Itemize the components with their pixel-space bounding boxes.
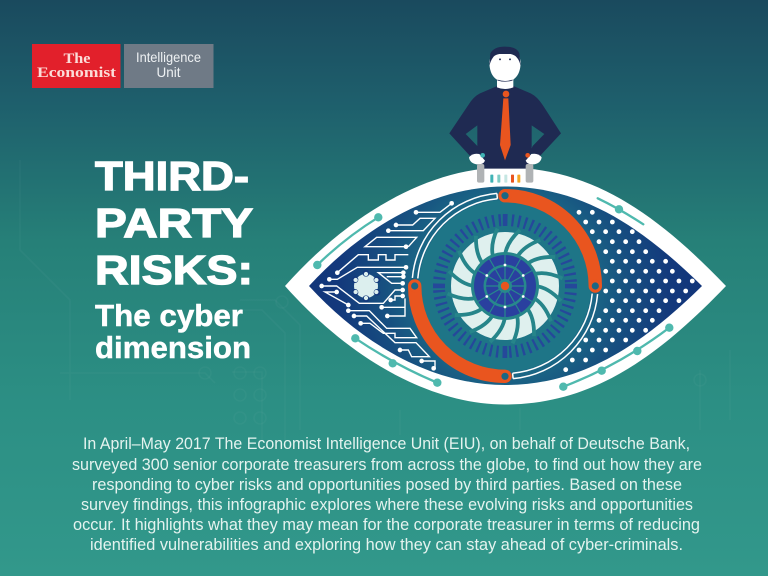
intro paragraph: In April–May 2017 The Economist Intelligence Unit (EIU), on behalf of Deutsche Bank, xyxy=(83,434,690,453)
figure: hands and cuffs xyxy=(469,153,542,164)
subtitle: dimension xyxy=(95,330,251,365)
intro paragraph xyxy=(72,434,702,554)
title: RISKS: xyxy=(95,247,253,293)
intro paragraph: surveyed 300 senior corporate treasurers from across the globe, to find out how they are xyxy=(72,455,702,474)
eye: circuit chip xyxy=(352,270,380,302)
eye: teal accent lines xyxy=(313,198,674,391)
figure: torso and arms xyxy=(449,86,561,169)
eye: dot matrix, right xyxy=(566,212,692,370)
title xyxy=(95,153,253,293)
figure: grey latches xyxy=(477,164,533,183)
intro paragraph: survey findings, this infographic explores where these evolving risks and opportunities xyxy=(81,495,693,514)
eye: circuit board traces, left xyxy=(319,201,454,371)
intro paragraph: responding to cyber risks and opportunities posed by third parties. Based on these xyxy=(92,475,682,494)
eye: blue iris shape xyxy=(309,186,702,385)
intro paragraph: identified vulnerabilities and exploring how they can stay ahead of cyber-criminals. xyxy=(90,535,683,554)
title: THIRD- xyxy=(95,153,249,199)
subtitle xyxy=(95,298,251,365)
eye: turbine blades xyxy=(448,229,562,343)
eye: pupil disc xyxy=(419,200,591,372)
subtitle: The cyber xyxy=(95,298,243,333)
logo: Intelligence Unit grey box xyxy=(124,44,214,88)
businessman figure xyxy=(449,47,561,183)
title: PARTY xyxy=(95,200,253,246)
logo: The Economist red box: The xyxy=(64,51,91,67)
eye: central hub xyxy=(474,255,536,317)
eye: dashed ring xyxy=(433,214,577,358)
eye: orange arcs with nodes xyxy=(410,191,600,381)
logo: Intelligence Unit grey box: Intelligence xyxy=(136,49,201,65)
figure: indicator lights xyxy=(490,175,520,183)
background circuit pattern xyxy=(20,160,730,440)
eye: white outline xyxy=(285,168,726,404)
logo: The Economist red box: Economist xyxy=(37,65,116,81)
logo: The Economist red box xyxy=(32,44,120,88)
logo: The Economist Intelligence Unit xyxy=(32,44,214,88)
eye: double line arcs xyxy=(412,193,598,379)
figure: neck and head xyxy=(489,47,521,89)
logo: Intelligence Unit grey box: Unit xyxy=(156,64,181,80)
intro paragraph: occur. It highlights what they may mean for the corporate treasurer in terms of reducing xyxy=(73,515,700,534)
figure: orange tie xyxy=(500,91,511,160)
eye illustration xyxy=(285,168,726,404)
